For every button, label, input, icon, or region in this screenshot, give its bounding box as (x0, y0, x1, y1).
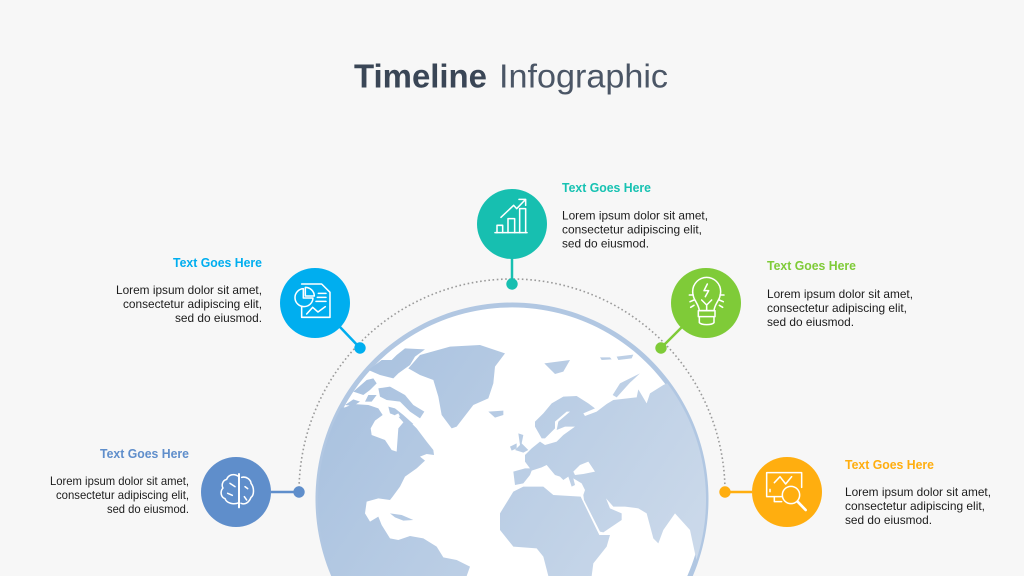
icon: report (295, 284, 330, 317)
text block: lower right orange: sed do eiusmod. (845, 513, 932, 527)
step: orange monitor (719, 457, 822, 527)
connector dot (506, 278, 518, 290)
title (354, 58, 668, 94)
connector dot (293, 486, 305, 498)
title: Infographic (499, 58, 668, 94)
title: Timeline (354, 58, 487, 94)
text block: lower right orange: Text Goes Here (845, 458, 934, 472)
icon: light bulb (689, 277, 724, 325)
icon: monitor and magnifier (767, 473, 806, 510)
step: teal chart (477, 189, 547, 290)
text block: upper left blue: Text Goes Here (173, 256, 262, 270)
node circle (671, 268, 741, 338)
text block: upper right green: sed do eiusmod. (767, 315, 854, 329)
text block: lower right orange: Lorem ipsum dolor sit amet, (845, 485, 991, 499)
connector dot (719, 486, 731, 498)
dotted arc (299, 279, 725, 492)
text block: lower left steel blue: Text Goes Here (100, 447, 189, 461)
connector dot (354, 342, 366, 354)
text block: upper right green: consectetur adipiscing elit, (767, 301, 907, 315)
text block: lower right orange (845, 458, 991, 527)
text block: lower left steel blue: consectetur adipiscing elit, (56, 488, 189, 502)
text block: lower left steel blue: sed do eiusmod. (107, 502, 189, 516)
map land (317, 345, 710, 576)
text block: upper right green (767, 259, 913, 329)
text block: upper left blue: Lorem ipsum dolor sit amet, (116, 283, 262, 297)
text block: upper right green: Lorem ipsum dolor sit amet, (767, 287, 913, 301)
step: steel blue brain (201, 457, 305, 527)
text block: upper left blue (116, 256, 262, 325)
node circle (477, 189, 547, 259)
text block: upper left blue: sed do eiusmod. (175, 311, 262, 325)
text block: top teal: Text Goes Here (562, 181, 651, 195)
icon: growth chart (495, 199, 527, 233)
node circle (752, 457, 822, 527)
globe (316, 303, 710, 576)
text block: lower left steel blue: Lorem ipsum dolor sit amet, (50, 474, 189, 488)
text block: top teal: sed do eiusmod. (562, 236, 649, 250)
step: blue report (280, 268, 366, 354)
node circle (201, 457, 271, 527)
text block: top teal (562, 181, 708, 250)
inland seas (395, 413, 595, 475)
step: green bulb (655, 268, 741, 354)
text block: upper right green: Text Goes Here (767, 259, 856, 273)
text block: upper left blue: consectetur adipiscing elit, (123, 297, 262, 311)
icon: brain (221, 474, 253, 507)
text block: lower left steel blue (50, 447, 189, 516)
text block: top teal: consectetur adipiscing elit, (562, 222, 702, 236)
connector dot (655, 342, 667, 354)
node circle (280, 268, 350, 338)
text block: lower right orange: consectetur adipiscing elit, (845, 499, 985, 513)
text block: top teal: Lorem ipsum dolor sit amet, (562, 208, 708, 222)
